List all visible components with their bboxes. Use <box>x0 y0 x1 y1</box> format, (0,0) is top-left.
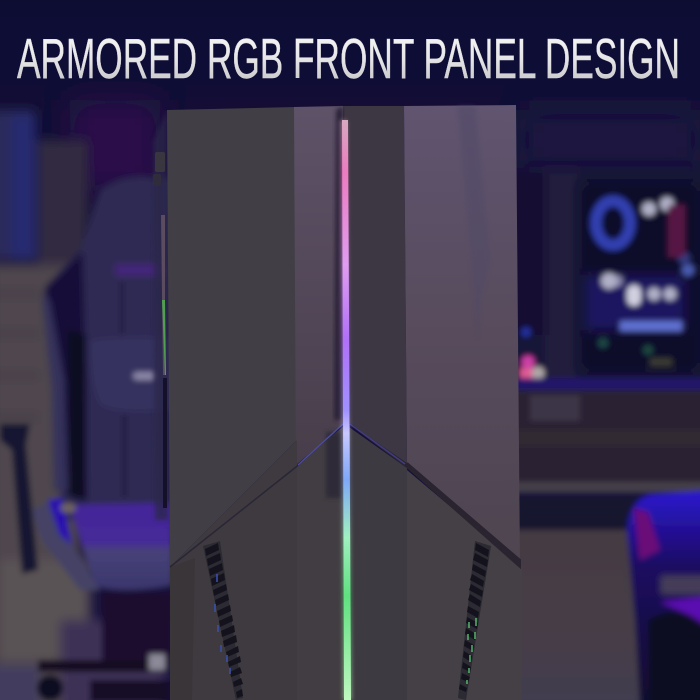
PC: dim lights <box>598 338 672 366</box>
case: lower centre right panel <box>349 427 407 700</box>
background: purple wall glow <box>70 100 700 190</box>
case: upper inner right panel <box>343 106 407 468</box>
chair: column and base <box>102 592 172 662</box>
background: left pillar <box>0 110 88 270</box>
chair: side shadow <box>46 252 85 500</box>
case: sweeping shadow on right panel <box>458 106 490 340</box>
case: side glass edge <box>153 110 168 520</box>
background: sofa <box>627 490 700 700</box>
background: desk lights <box>520 327 544 380</box>
case: lower left panel <box>170 440 297 700</box>
case: upper right panel <box>404 105 520 567</box>
chair: lumbar cushion <box>90 337 170 412</box>
background: desk and shelf <box>510 378 700 700</box>
case: lower centre left panel <box>297 425 345 700</box>
chair: armrest post <box>0 424 38 574</box>
background: desktop PC <box>580 182 700 372</box>
PC: white lights <box>601 197 694 306</box>
case: strip channel <box>334 106 343 420</box>
case: upper inner left panel <box>294 106 343 465</box>
case: left vent <box>203 541 243 700</box>
chair: outer edge <box>42 295 68 490</box>
background: right wall and pillar <box>510 170 700 385</box>
chair: seat <box>70 503 172 590</box>
case: chevron seam left <box>170 424 343 567</box>
case: lower right panel <box>407 470 522 700</box>
PC case <box>153 105 522 700</box>
case: right vent <box>458 541 491 700</box>
PC: red strip <box>668 205 685 257</box>
PC: blue glow bar <box>620 321 682 331</box>
background: brick wall <box>0 264 165 700</box>
chair: back shell <box>45 176 170 520</box>
case: RGB strip <box>342 120 351 700</box>
background: gaming chair <box>0 176 172 700</box>
case: upper left panel <box>167 107 297 567</box>
case: RGB strip glow <box>340 120 352 700</box>
PC: blue fan ring <box>596 201 630 245</box>
case: chevron seam right <box>350 424 520 567</box>
chair: headrest strap <box>115 264 165 276</box>
